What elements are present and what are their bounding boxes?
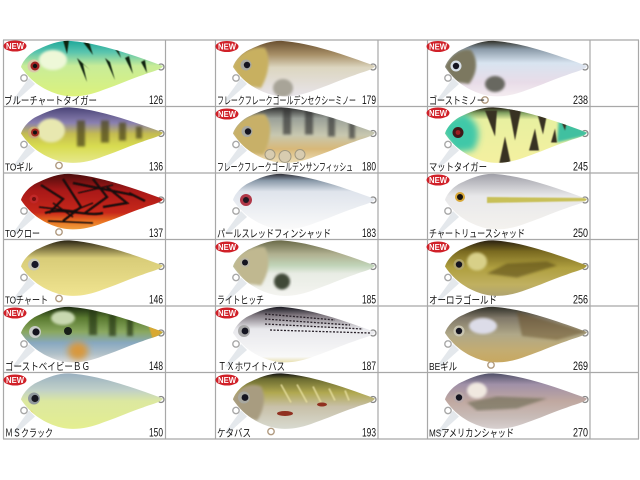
label: 187 xyxy=(218,359,376,373)
lure 180 flake gold sunfish xyxy=(225,107,376,168)
label: 256: 256 xyxy=(573,292,588,306)
label: 269: BEギル xyxy=(429,361,457,373)
NEW badge: 256: NEW xyxy=(429,243,447,252)
label: 185: ライトヒッチ xyxy=(217,294,264,306)
label: 179 xyxy=(217,93,376,107)
label: 269: 269 xyxy=(573,359,588,373)
label: 269 xyxy=(429,359,588,373)
label: 126: 126 xyxy=(149,93,163,107)
lure 270 MS American shad xyxy=(437,373,588,434)
NEW badge: 193 xyxy=(216,374,238,386)
label: 245: マットタイガー xyxy=(429,162,487,174)
label: 148: 148 xyxy=(149,359,163,373)
NEW badge: 193: NEW xyxy=(218,376,236,385)
label: 136: 136 xyxy=(149,160,163,174)
NEW badge: 126: NEW xyxy=(6,42,24,51)
label: 180 xyxy=(217,160,376,174)
NEW badge: 148: NEW xyxy=(6,309,24,318)
label: 238 xyxy=(429,93,588,107)
label: 146 xyxy=(5,292,163,306)
label: 270: MSアメリカンシャッド xyxy=(429,428,514,440)
label: 148: ゴーストベイビーＢＧ xyxy=(5,360,90,373)
label: 245 xyxy=(429,160,588,174)
label: 250: チャートリュースシャッド xyxy=(429,228,525,240)
NEW badge: 250: NEW xyxy=(429,176,447,185)
label: 183: 183 xyxy=(362,226,376,240)
label: 146: TOチャート xyxy=(5,294,48,306)
label: 185 xyxy=(217,292,376,306)
label: 136: TOギル xyxy=(5,162,33,174)
NEW badge: 245: NEW xyxy=(429,109,447,118)
NEW badge: 150: NEW xyxy=(6,376,24,385)
label: 137 xyxy=(5,226,163,240)
label: 148 xyxy=(5,359,163,373)
label: 180: フレークフレークゴールデンサンフィッシュ xyxy=(217,160,353,174)
lure 183 pearl red fin shad xyxy=(225,174,376,234)
label: 179: 179 xyxy=(362,93,376,107)
NEW badge: 187: NEW xyxy=(218,309,236,318)
label: 136 xyxy=(5,160,163,174)
NEW badge: 180: NEW xyxy=(218,110,236,119)
label: 180: 180 xyxy=(362,160,376,174)
label: 185: 185 xyxy=(362,292,376,306)
lure 187 TX white bass xyxy=(225,307,376,367)
lure 245 matte tiger xyxy=(437,107,592,168)
label: 250 xyxy=(429,226,588,240)
lure 126 blue chartreuse tiger xyxy=(13,40,164,101)
NEW badge: 150 xyxy=(4,374,26,386)
label: 146: 146 xyxy=(149,292,163,306)
label: 150: ＭＳクラック xyxy=(5,428,53,440)
NEW badge: 256 xyxy=(426,242,450,252)
label: 150 xyxy=(5,426,163,440)
label: 179: フレークフレークゴールデンセクシーミノー xyxy=(217,94,356,107)
label: 126: ブルーチャートタイガー xyxy=(4,94,97,107)
label: 238: ゴーストミノー xyxy=(429,94,485,107)
lure 269 BE gill xyxy=(437,307,588,368)
NEW badge: 238: NEW xyxy=(429,42,447,52)
NEW badge: 187 xyxy=(216,308,238,318)
label: 270: 270 xyxy=(573,426,588,440)
label: 187: ＴＸホワイトバス xyxy=(218,361,285,373)
lure 148 ghost baby bluegill xyxy=(13,307,165,367)
NEW badge: 148 xyxy=(4,308,26,318)
NEW badge: 180 xyxy=(216,108,238,120)
label: 193 xyxy=(217,426,376,440)
lure 250 chartreuse shad xyxy=(437,174,588,234)
label: 256 xyxy=(429,292,588,306)
lure 238 ghost minnow xyxy=(437,41,588,103)
lure 137 TO craw xyxy=(13,174,164,235)
NEW badge: 185: NEW xyxy=(218,243,236,252)
label: 187: 187 xyxy=(362,359,376,373)
label: 238: 238 xyxy=(573,93,588,107)
label: 183: パールスレッドフィンシャッド xyxy=(217,228,331,240)
label: 193: 193 xyxy=(362,426,376,440)
NEW badge: 179: NEW xyxy=(218,42,236,52)
lure 185 light hitch xyxy=(225,240,376,300)
label: 193: ケタバス xyxy=(217,428,251,440)
lure 256 aurora gold xyxy=(437,240,588,300)
NEW badge: 179 xyxy=(216,41,238,52)
label: 126 xyxy=(4,93,163,107)
label: 150: 150 xyxy=(149,426,163,440)
label: 270 xyxy=(429,426,588,440)
lure 146 TO chartreuse xyxy=(13,240,164,302)
NEW badge: 238 xyxy=(426,41,450,52)
label: 256: オーロラゴールド xyxy=(429,294,497,306)
label: 245: 245 xyxy=(573,160,588,174)
label: 250: 250 xyxy=(573,226,588,240)
lure 193 keta bass xyxy=(225,373,376,435)
NEW badge: 185 xyxy=(216,242,238,252)
NEW badge: 245 xyxy=(426,108,450,118)
label: 137: TOクロー xyxy=(5,228,40,240)
NEW badge: 126 xyxy=(4,40,26,52)
lure 136 TO gill xyxy=(13,107,164,169)
lure 150 MS crack xyxy=(13,373,164,434)
label: 137: 137 xyxy=(149,226,163,240)
lure 179 flake gold sexy minnow xyxy=(225,41,376,101)
NEW badge: 250 xyxy=(426,174,450,186)
